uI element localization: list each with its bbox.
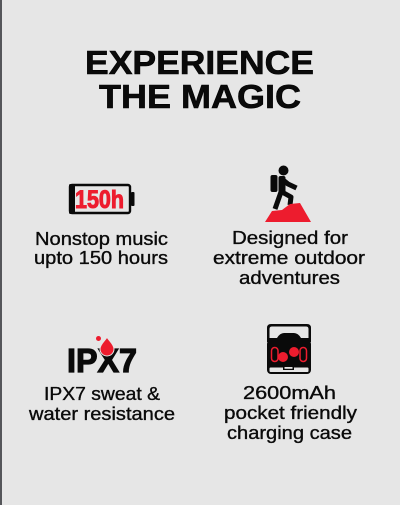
text: sweat and water resistance: IPX7 sweat & xyxy=(44,384,160,404)
panel: outdoor feature xyxy=(213,166,365,288)
panel: charging case feature xyxy=(224,324,357,443)
text: sweat and water resistance xyxy=(28,384,175,424)
icon: battery 150h: 150h xyxy=(75,186,124,214)
title xyxy=(85,45,314,116)
text: outdoor adventures: adventures xyxy=(239,268,340,288)
text: charging case: 2600mAh xyxy=(243,383,336,403)
text: charging case xyxy=(224,383,357,443)
icon: charging case with earbuds xyxy=(267,324,311,374)
icon: hiker on red mountain xyxy=(265,166,311,222)
title: THE MAGIC xyxy=(99,79,301,116)
text: nonstop music xyxy=(34,229,168,268)
text: outdoor adventures xyxy=(213,228,365,288)
text: nonstop music: upto 150 hours xyxy=(34,248,168,268)
text: sweat and water resistance: water resistance xyxy=(28,404,175,424)
text: outdoor adventures: Designed for xyxy=(232,228,348,248)
panel: battery feature xyxy=(34,184,168,268)
text: charging case: pocket friendly xyxy=(224,403,357,423)
icon: IPX7 with drops: IPX7 xyxy=(67,342,137,379)
panel: IPX7 feature xyxy=(28,336,175,424)
text: outdoor adventures: extreme outdoor xyxy=(213,248,365,268)
title: EXPERIENCE xyxy=(85,45,314,82)
text: charging case: charging case xyxy=(227,423,352,443)
text: nonstop music: Nonstop music xyxy=(35,229,168,249)
